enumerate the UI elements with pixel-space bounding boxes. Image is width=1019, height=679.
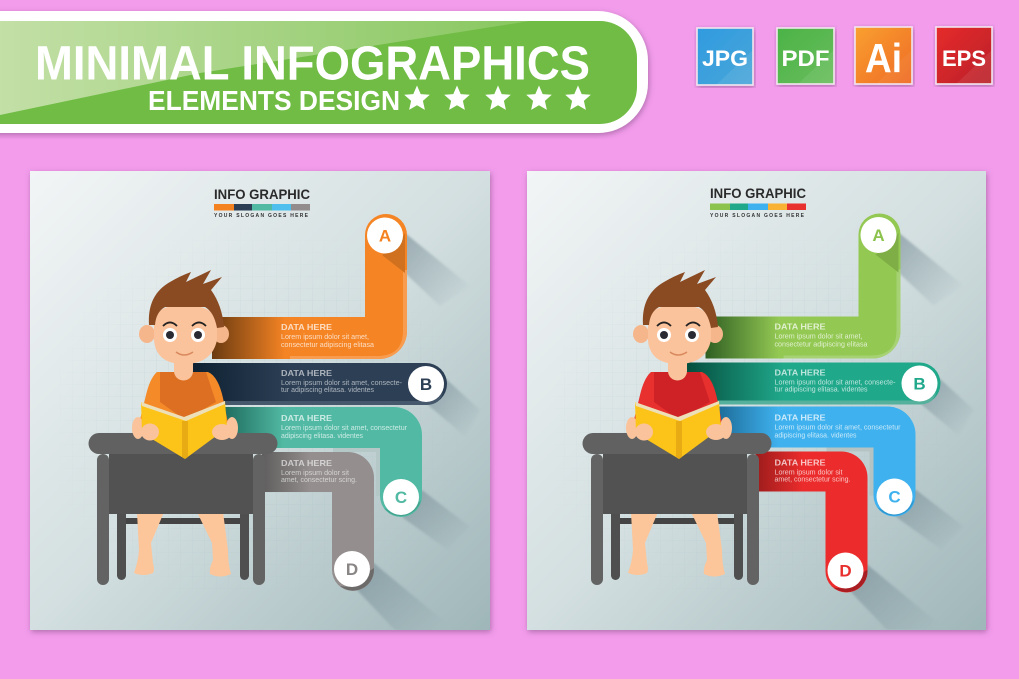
- text block D: [281, 458, 357, 484]
- label D: [828, 552, 864, 588]
- text block A: consectetur adipiscing elitasa: [774, 342, 868, 348]
- text block D: Lorem ipsum dolor sit: [774, 470, 843, 476]
- text block C: DATA HERE: [774, 412, 826, 422]
- ribbon: B green-teal: [684, 362, 940, 404]
- heading: info graphic: INFO GRAPHIC: [710, 185, 806, 201]
- label B: [408, 366, 444, 402]
- text block B: [281, 368, 403, 394]
- text block C: DATA HERE: [281, 413, 332, 423]
- text block C: adipiscing elitasa. videntes: [281, 433, 363, 440]
- label B: B: [420, 375, 432, 394]
- label A: [860, 217, 896, 253]
- ribbon: C teal: [222, 407, 422, 517]
- ribbon: B navy: [190, 363, 447, 405]
- open book: [141, 401, 227, 459]
- heading: info graphic: YOUR SLOGAN GOES HERE: [710, 213, 805, 219]
- label D: D: [839, 562, 852, 580]
- illustration: boy at desk: [582, 270, 772, 585]
- badge: PDF: [777, 28, 834, 84]
- panel: left infographic: [30, 171, 490, 640]
- text block A: [774, 322, 868, 348]
- label C: C: [888, 488, 901, 506]
- heading: info graphic: [710, 185, 806, 219]
- text block B: [774, 368, 896, 394]
- rating stars: [404, 86, 591, 110]
- label C: C: [395, 488, 407, 507]
- banner subtitle: ELEMENTS DESIGN: [148, 85, 400, 116]
- text block A: [281, 322, 374, 349]
- text block A: DATA HERE: [281, 322, 332, 332]
- text block B: DATA HERE: [774, 368, 826, 378]
- ribbon: A orange: [212, 214, 407, 359]
- text block A: consectetur adipiscing elitasa: [281, 342, 374, 349]
- text block A: Lorem ipsum dolor sit amet,: [281, 334, 369, 341]
- label A: A: [379, 226, 391, 246]
- text block D: DATA HERE: [281, 458, 332, 468]
- label C: [383, 479, 419, 515]
- label B: [902, 366, 938, 402]
- text block A: DATA HERE: [774, 322, 826, 332]
- label B: B: [913, 374, 926, 394]
- badge: EPS: [936, 27, 992, 84]
- text block C: Lorem ipsum dolor sit amet, consectetur: [281, 425, 408, 432]
- banner title: MINIMAL INFOGRAPHICS: [35, 38, 590, 90]
- ribbon: A green: [706, 214, 900, 358]
- heading: info graphic: INFO GRAPHIC: [214, 186, 310, 202]
- label D: [334, 551, 370, 587]
- long shadows: [357, 233, 480, 640]
- text block D: amet, consectetur scing.: [281, 477, 357, 484]
- badge: PDF: PDF: [782, 46, 830, 71]
- text block B: tur adipiscing elitasa. videntes: [774, 386, 868, 394]
- illustration: boy at desk: [88, 270, 278, 585]
- text block D: [774, 458, 851, 484]
- open book: [635, 401, 721, 459]
- ribbon: D gray: [262, 452, 374, 591]
- text block D: Lorem ipsum dolor sit: [281, 470, 349, 477]
- badge: EPS: EPS: [942, 46, 986, 71]
- badge: Ai: [855, 27, 912, 84]
- label D: D: [346, 560, 358, 579]
- heading: info graphic: [214, 186, 310, 219]
- text block B: Lorem ipsum dolor sit amet, consecte-: [774, 380, 896, 386]
- text block B: Lorem ipsum dolor sit amet, consecte-: [281, 380, 403, 387]
- badge: Ai: Ai: [865, 35, 902, 81]
- label C: [876, 478, 912, 514]
- panel: right infographic: [527, 171, 986, 642]
- ribbon: C blue: [716, 406, 916, 516]
- badge: JPG: JPG: [702, 46, 748, 71]
- ribbon: D red: [756, 452, 868, 592]
- heading: info graphic: YOUR SLOGAN GOES HERE: [214, 213, 309, 219]
- text block C: Lorem ipsum dolor sit amet, consectetur: [774, 424, 901, 432]
- text block C: [774, 412, 901, 440]
- text block C: [281, 413, 408, 440]
- label A: A: [872, 226, 885, 245]
- text block B: tur adipiscing elitasa. videntes: [281, 387, 374, 394]
- text block A: Lorem ipsum dolor sit amet,: [774, 334, 863, 340]
- text block D: amet, consectetur scing.: [774, 476, 851, 484]
- text block D: DATA HERE: [774, 458, 826, 468]
- label A: [367, 218, 403, 254]
- long shadows: [850, 232, 974, 642]
- text block B: DATA HERE: [281, 368, 332, 378]
- banner: [0, 11, 648, 133]
- badge: JPG: [697, 28, 753, 85]
- text block C: adipiscing elitasa. videntes: [774, 432, 857, 440]
